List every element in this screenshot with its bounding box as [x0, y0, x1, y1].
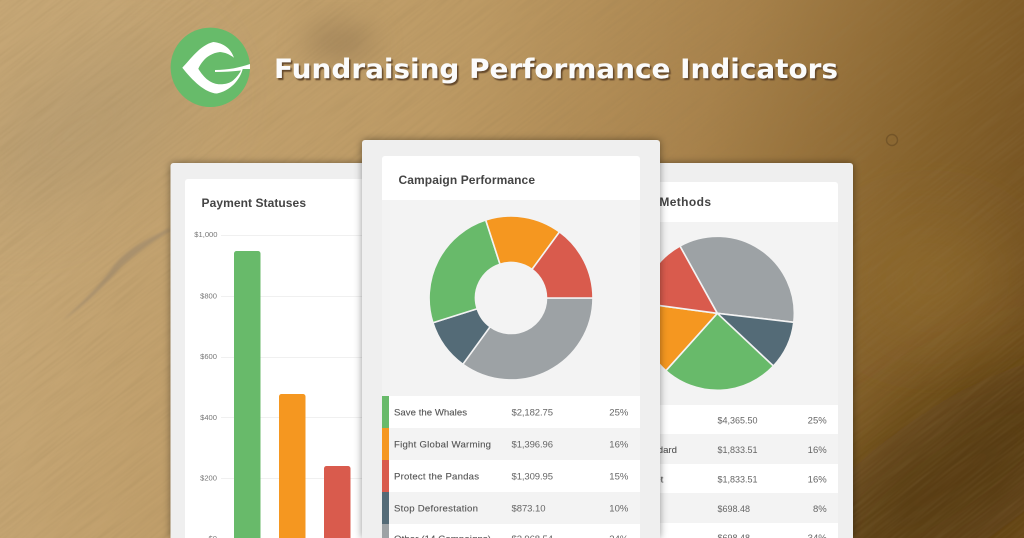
legend table: campaign performance: Save the Whales — [394, 408, 467, 418]
bar chart: payment statuses: $400 — [200, 413, 217, 422]
bar chart: payment statuses: $800 — [200, 292, 217, 300]
table: payment methods: $1,833.51 — [718, 445, 758, 455]
legend table: campaign performance: 25% — [609, 408, 629, 418]
table: payment methods: $4,365.50 — [718, 416, 758, 426]
bar chart: payment statuses: $1,000 — [194, 230, 218, 239]
bar chart: payment statuses — [194, 230, 460, 538]
panel: payment methods (right card) — [560, 163, 853, 538]
legend table: campaign performance: $1,396.96 — [512, 440, 553, 450]
bar chart: payment statuses: $200 — [200, 474, 217, 482]
heading: campaign performance: Campaign Performance — [398, 173, 535, 187]
legend table: campaign performance: Stop Deforestation — [394, 504, 478, 514]
table: payment methods: 16% — [808, 445, 827, 456]
card body: campaign performance — [382, 156, 640, 538]
title: Fundraising Performance Indicators — [274, 54, 838, 85]
card body: payment methods — [575, 182, 838, 538]
legend table: campaign performance: 10% — [609, 504, 629, 514]
donut chart: campaign performance — [429, 216, 593, 380]
table: payment methods: Standard — [638, 445, 677, 456]
legend table: campaign performance: Protect the Pandas — [394, 472, 479, 482]
legend table: campaign performance: $2,182.75 — [512, 408, 553, 418]
bar chart: payment statuses: $600 — [200, 352, 217, 361]
table: payment methods: $1,833.51 — [718, 474, 758, 484]
pie chart: payment methods — [640, 236, 794, 390]
panel: campaign performance (center card) — [362, 140, 660, 538]
card body: payment statuses — [185, 179, 465, 538]
table: payment methods: 16% — [808, 474, 827, 486]
table: payment methods: 8% — [813, 504, 827, 515]
table: payment methods — [637, 416, 827, 538]
table: payment methods: 25% — [808, 416, 827, 426]
legend table: campaign performance: $1,309.95 — [512, 472, 553, 482]
legend table: campaign performance: 16% — [609, 440, 629, 450]
heading: payment statuses: Payment Statuses — [202, 196, 306, 210]
legend table: campaign performance: $873.10 — [512, 504, 546, 514]
legend table: campaign performance: 15% — [609, 472, 629, 482]
table: payment methods: Wallet — [637, 474, 664, 486]
legend table: campaign performance: Fight Global Warming — [394, 440, 491, 450]
legend table: campaign performance — [382, 396, 629, 538]
panel: payment statuses (left card) — [170, 163, 470, 538]
logo: green circle with white leaf G — [171, 28, 250, 107]
table: payment methods: $698.48 — [718, 504, 750, 514]
heading: payment methods: Payment Methods — [603, 195, 711, 209]
